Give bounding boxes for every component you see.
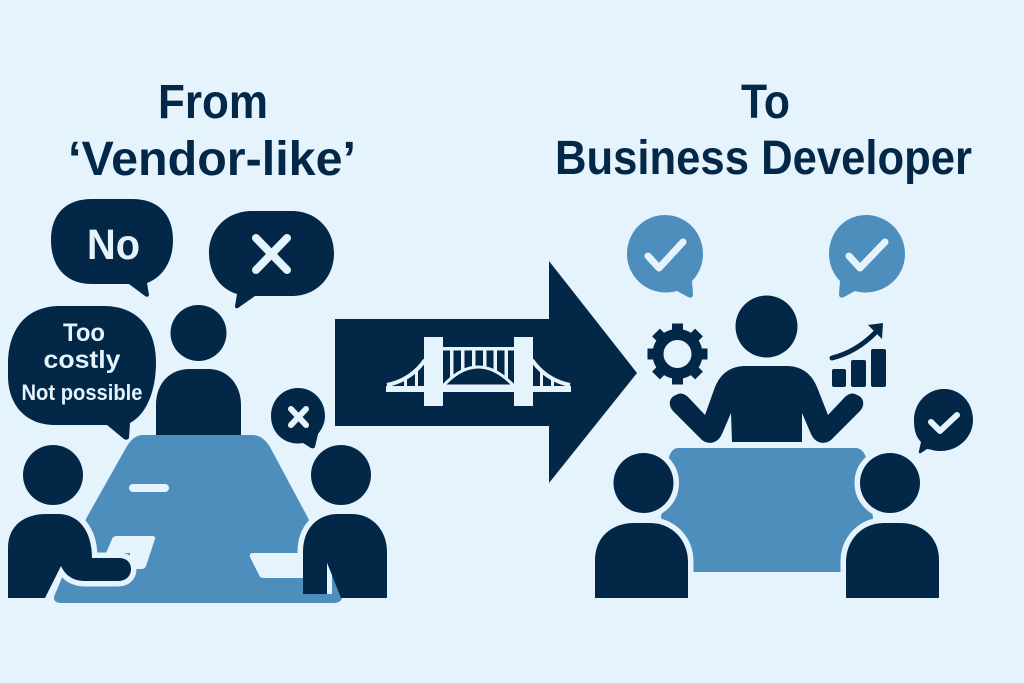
meeting table: [54, 435, 342, 603]
meeting table: [661, 448, 873, 572]
title: from vendor-like: From: [158, 76, 268, 129]
speech bubble: No: No: [87, 221, 140, 269]
title: to business developer: To: [741, 76, 790, 129]
arrow: [335, 261, 637, 483]
speech bubble: No: [51, 199, 173, 297]
title: to business developer: [555, 76, 972, 185]
speech bubble: cross: [209, 211, 334, 308]
title: from vendor-like: [68, 76, 356, 186]
speech bubble: check left: [627, 215, 703, 298]
top person: [156, 305, 241, 436]
center person: [670, 296, 863, 443]
title: to business developer: Business Developer: [555, 132, 972, 185]
right person: [303, 445, 387, 598]
speech bubble: too costly, not possible: costly: [44, 346, 121, 374]
small speech bubble: check: [914, 389, 973, 453]
arrow with bridge: [335, 261, 637, 483]
laptop right: [250, 553, 305, 578]
icon: growth chart: [832, 323, 886, 387]
icon: gear: [648, 324, 708, 384]
panel: business developer meeting: [595, 215, 973, 598]
speech bubble: check right: [829, 215, 905, 298]
laptop left: [106, 536, 155, 569]
speech bubble: too costly, not possible: Not possible: [22, 380, 142, 405]
panel: vendor-like meeting: [8, 199, 387, 603]
speech bubble: too costly, not possible: [8, 306, 156, 440]
title: from vendor-like: ‘Vendor-like’: [68, 133, 356, 186]
left person: [8, 445, 131, 598]
right person: [846, 453, 939, 598]
icon: bridge: [386, 337, 571, 406]
speech bubble: too costly, not possible: Too: [63, 319, 105, 347]
small speech bubble: cross: [271, 388, 325, 448]
left person: [595, 453, 688, 598]
